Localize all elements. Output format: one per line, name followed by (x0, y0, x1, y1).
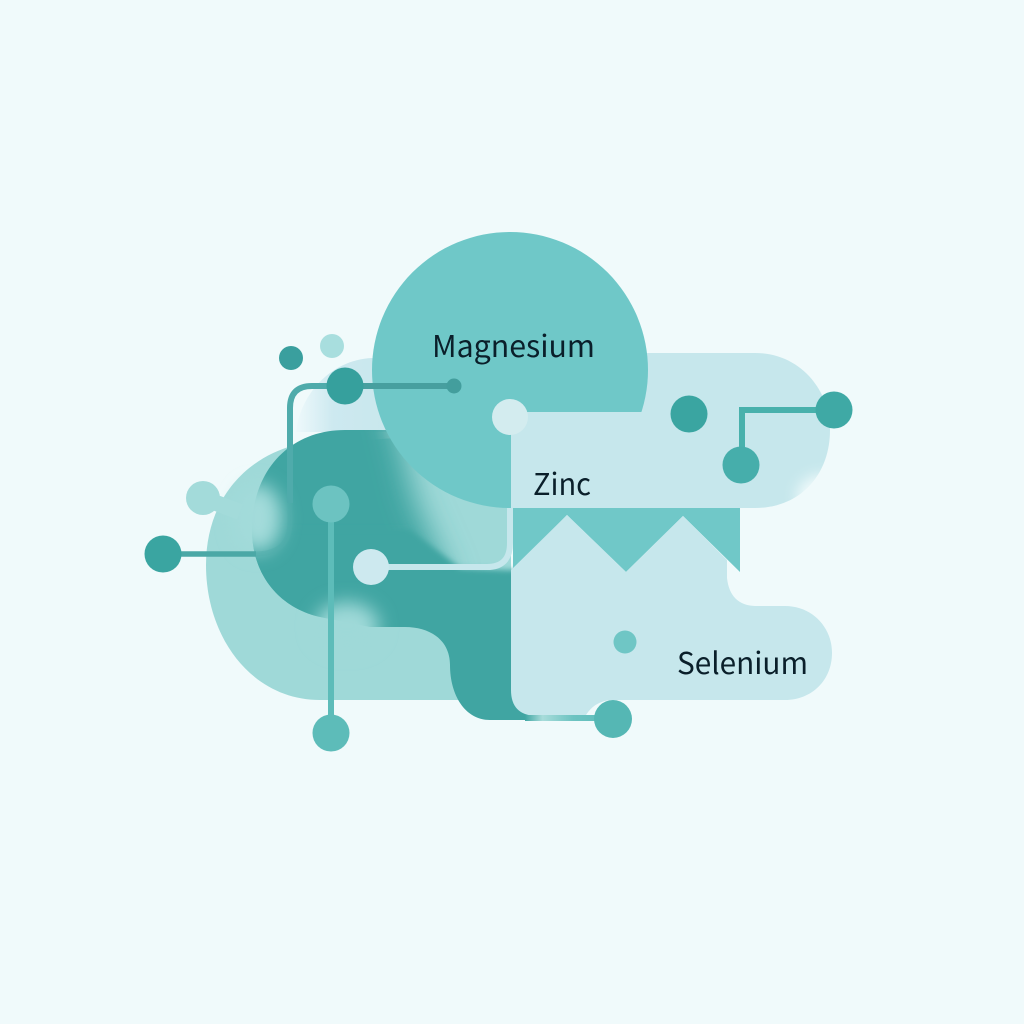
icon: mid pale node (353, 549, 389, 585)
icon: pale dot top left (320, 334, 344, 358)
blurred accent: left join (234, 484, 282, 552)
icon: dark dot top left (279, 346, 303, 370)
connector: bottom line (525, 715, 613, 721)
connector: faint arc to left line (255, 503, 290, 554)
panel: pale upper band behind magnesium (296, 358, 420, 432)
connector: upper left line (290, 386, 346, 503)
connector: left node line (164, 551, 256, 557)
icon: vertical top node (312, 486, 350, 522)
panel: zinc lower band (511, 412, 671, 508)
label: Selenium: Selenium (677, 639, 808, 683)
icon: upper line node (326, 368, 364, 404)
connector: vertical line (328, 504, 334, 734)
icon: right top node (816, 392, 852, 428)
panel: zinc upper band (600, 353, 830, 508)
icon: vertical bottom node (312, 714, 350, 752)
panel: dark teal blended shape (252, 430, 528, 720)
connector: right bracket line (742, 410, 834, 464)
connector: mid pale line (371, 508, 510, 567)
icon: left pale node (186, 481, 220, 515)
icon: selenium dot (614, 630, 636, 654)
icon: right lower node (722, 446, 760, 484)
icon: left node (144, 536, 182, 572)
icon: pale node at zinc corner (492, 399, 528, 435)
panel: teal zigzag band (513, 508, 740, 572)
connector: pale node tail (203, 498, 240, 512)
blurred accent: lower join (315, 602, 379, 650)
blurred accent: zinc panel fade (797, 475, 849, 519)
icon: bottom node (594, 700, 632, 738)
connector: upper right line (346, 383, 455, 389)
label: Magnesium: Magnesium (432, 322, 595, 366)
icon: upper line end dot (446, 378, 462, 394)
label: Zinc: Zinc (533, 460, 591, 504)
panel: magnesium circle (372, 232, 648, 508)
panel: selenium lower shape (511, 515, 832, 716)
panel: light teal left blob (206, 430, 511, 700)
icon: zinc dot (670, 396, 708, 432)
